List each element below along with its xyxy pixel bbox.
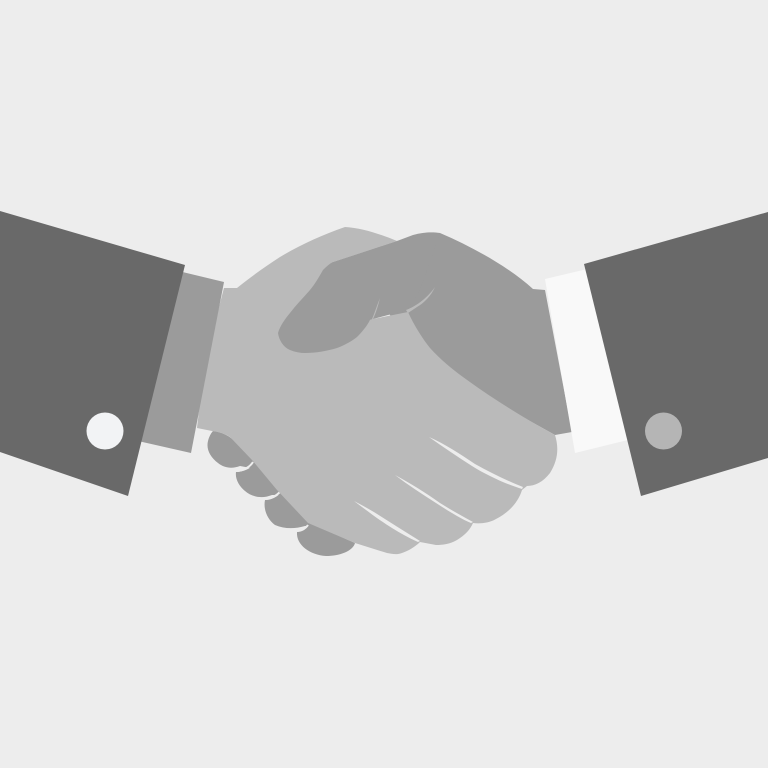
left hand — [197, 227, 557, 554]
right cufflink — [645, 412, 682, 450]
finger creases — [354, 437, 523, 542]
finger gaps — [236, 462, 308, 531]
right hand thumb — [278, 233, 440, 353]
right hand — [300, 232, 572, 435]
left cufflink — [86, 412, 124, 450]
right jacket sleeve — [584, 212, 768, 496]
thumb crease — [372, 287, 435, 319]
left hand fingers behind — [207, 431, 355, 556]
left jacket sleeve — [0, 211, 185, 496]
left shirt cuff — [125, 269, 224, 453]
right shirt cuff — [545, 266, 640, 453]
